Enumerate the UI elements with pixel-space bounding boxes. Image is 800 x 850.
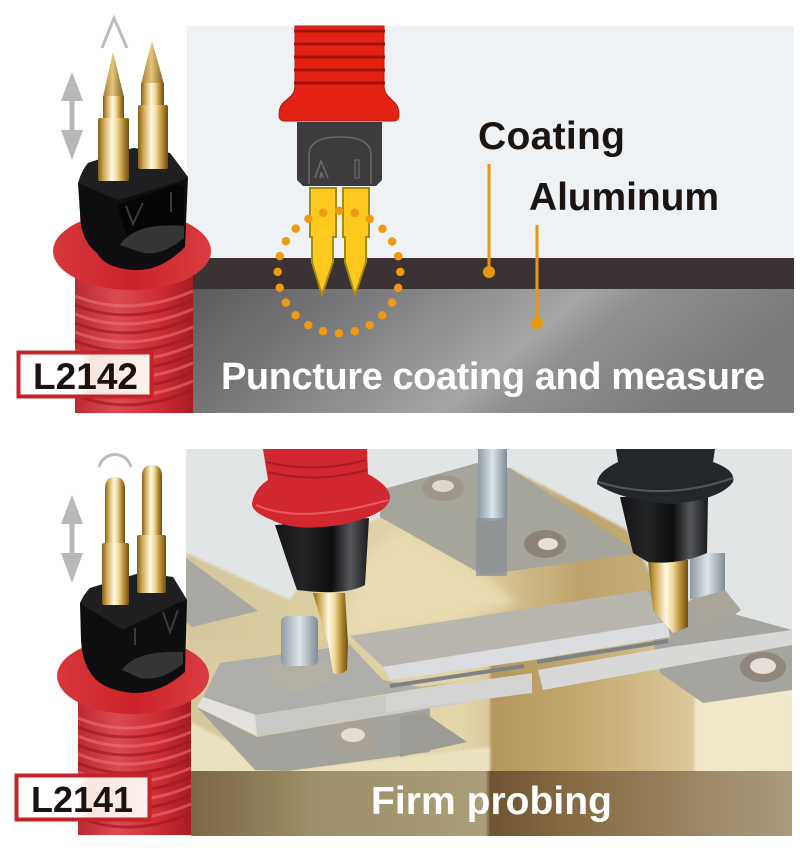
double arrow bbox=[61, 72, 83, 160]
product photo: L2142 pointed probe bbox=[18, 18, 211, 413]
model label: L2142 bbox=[33, 356, 138, 397]
pin left bbox=[98, 52, 129, 181]
yellow pin left bbox=[310, 188, 336, 295]
bar weld band bbox=[383, 622, 670, 680]
arc tip symbol bbox=[99, 455, 131, 467]
left aluminum plate with bolt bbox=[197, 645, 470, 771]
plate top face bbox=[203, 645, 470, 715]
double arrow bbox=[61, 495, 83, 583]
lower reflective plate bbox=[197, 707, 430, 771]
red flange bbox=[252, 449, 390, 528]
V and I markings bbox=[126, 192, 171, 224]
red ribbed sleeve bbox=[279, 26, 399, 121]
weld lines bbox=[390, 641, 668, 686]
dotted highlight circle bbox=[278, 211, 400, 333]
black head bbox=[80, 573, 187, 693]
bolt bbox=[281, 616, 318, 666]
panel: firm probing photo bbox=[186, 449, 792, 836]
bar top surface bbox=[350, 590, 667, 667]
screws on back plate bbox=[422, 475, 566, 558]
black connector bbox=[620, 497, 708, 563]
coating layer bbox=[193, 258, 794, 289]
plate corner bbox=[197, 697, 257, 736]
panel: coating puncture diagram bbox=[187, 26, 794, 413]
leader line: Coating bbox=[483, 164, 495, 278]
caption: Puncture coating and measure: Puncture coating and measure bbox=[221, 356, 765, 398]
gold pin bbox=[313, 593, 348, 674]
product photo: L2141 rounded probe bbox=[16, 455, 209, 835]
red test probe in photo bbox=[252, 449, 390, 674]
illustrated probe bbox=[279, 26, 399, 295]
hex nut bbox=[270, 660, 330, 692]
pin left bbox=[102, 477, 129, 605]
left back plate bbox=[186, 558, 258, 627]
front right screw bbox=[740, 652, 786, 682]
gold pins bbox=[648, 560, 688, 633]
ribbed red body bbox=[78, 700, 191, 835]
leader line: Aluminum bbox=[531, 225, 543, 329]
left front block plate bbox=[400, 712, 467, 757]
chevron tip symbol bbox=[102, 18, 127, 48]
red collar bbox=[57, 638, 209, 714]
caption: Firm probing: Firm probing bbox=[371, 780, 612, 823]
yellow pin right bbox=[343, 188, 369, 295]
photo background bbox=[186, 449, 792, 836]
lower strip left bbox=[386, 673, 532, 712]
I and V markings bbox=[135, 610, 178, 645]
black test probe in photo bbox=[597, 449, 741, 633]
lower strip right bbox=[538, 630, 792, 690]
welded busbar bbox=[350, 590, 792, 712]
diagram background bbox=[187, 26, 794, 413]
rear bolt and nut bbox=[690, 553, 725, 599]
cream insulator blocks bbox=[186, 468, 792, 780]
black connector bbox=[275, 518, 369, 592]
label: Coating: Coating bbox=[478, 115, 625, 158]
screw bbox=[330, 722, 376, 752]
ribbed red body bbox=[75, 270, 193, 413]
red collar bbox=[53, 212, 211, 290]
right plate bbox=[647, 590, 792, 703]
vertical threaded rod bbox=[478, 449, 507, 521]
plate front edge bbox=[255, 695, 470, 736]
black connector head bbox=[297, 122, 382, 186]
caption band bbox=[191, 771, 792, 836]
pin right bbox=[137, 465, 166, 593]
black head bbox=[78, 148, 188, 270]
label: Aluminum: Aluminum bbox=[529, 176, 719, 219]
aluminum layer bbox=[193, 289, 794, 413]
back metal plate bbox=[380, 463, 640, 575]
model label: L2141 bbox=[31, 779, 133, 820]
pin right bbox=[138, 41, 168, 169]
